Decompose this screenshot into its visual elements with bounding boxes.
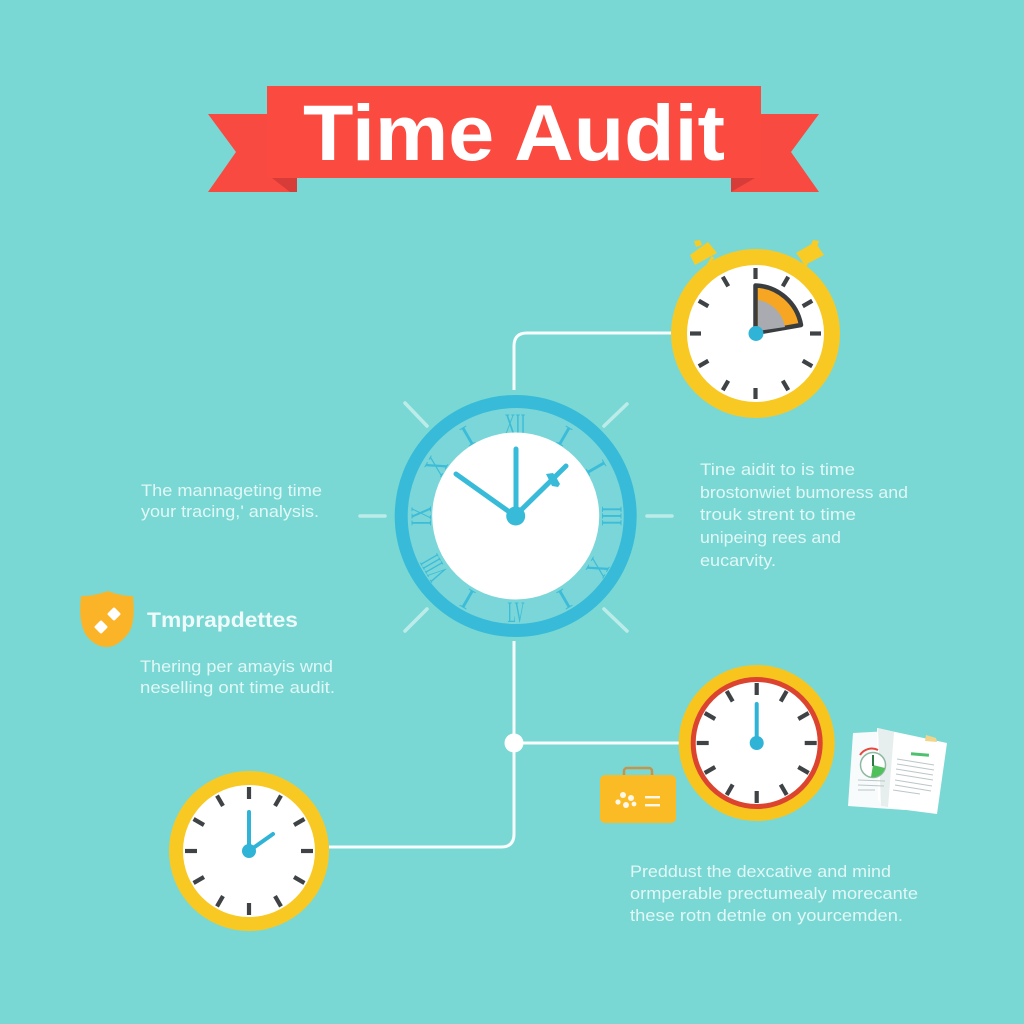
alarm bells — [690, 240, 824, 267]
roman numerals: I — [455, 420, 480, 453]
rays — [360, 403, 672, 631]
text block: left section: neselling ont time audit. — [140, 678, 335, 697]
text block: left intro — [141, 481, 322, 521]
text block: bottom right description — [630, 862, 918, 925]
text block: right description: unipeing rees and — [700, 528, 841, 547]
roman numerals: I — [455, 582, 480, 615]
tick marks — [690, 268, 821, 399]
tick marks — [185, 787, 313, 915]
text block: left section — [140, 657, 335, 697]
text block: right description: brostonwiet bumoress and — [700, 483, 908, 502]
text block: right description: Tine aidit to is time — [700, 460, 855, 479]
bottom left clock — [169, 771, 329, 931]
tick marks — [697, 683, 817, 803]
connector lines — [329, 333, 681, 847]
title banner — [208, 86, 819, 192]
clock hands — [456, 449, 566, 526]
text block: right description: eucarvity. — [700, 551, 776, 570]
roman numerals: X — [579, 553, 616, 583]
roman numerals: VIII — [414, 549, 455, 586]
text block: right description — [700, 460, 908, 570]
text block: left intro: your tracing,' analysis. — [141, 502, 319, 521]
roman numerals: LV — [508, 596, 525, 629]
roman numerals: IX — [405, 506, 438, 526]
text block: bottom right description: ormperable prectumealy morecante — [630, 884, 918, 903]
heading: left section: Tmprapdettes — [147, 609, 298, 632]
connector node — [504, 734, 524, 752]
clock hand — [755, 704, 759, 743]
roman numerals: XII — [504, 408, 526, 441]
roman numerals: I — [552, 420, 577, 453]
roman numerals: I — [552, 582, 577, 615]
roman numerals: I — [579, 455, 612, 480]
central clock — [360, 402, 672, 631]
text block: left intro: The mannageting time — [141, 481, 322, 500]
title: Time Audit — [303, 88, 725, 177]
roman numerals: III — [595, 506, 628, 526]
roman numerals: X — [418, 451, 455, 481]
time wedge — [756, 286, 801, 333]
clock hands — [249, 812, 273, 851]
icon: documents — [848, 728, 947, 814]
bottom right clock — [679, 665, 835, 821]
icon: briefcase — [600, 768, 676, 823]
top right alarm clock — [671, 240, 840, 418]
text block: left section: Thering per amayis wnd — [140, 657, 333, 676]
text block: bottom right description: these rotn detnle on yourcemden. — [630, 906, 903, 925]
icon: shield — [80, 591, 134, 647]
roman numerals — [405, 408, 628, 629]
text block: bottom right description: Preddust the dexcative and mind — [630, 862, 891, 881]
text block: right description: trouk strent to time — [700, 505, 856, 524]
